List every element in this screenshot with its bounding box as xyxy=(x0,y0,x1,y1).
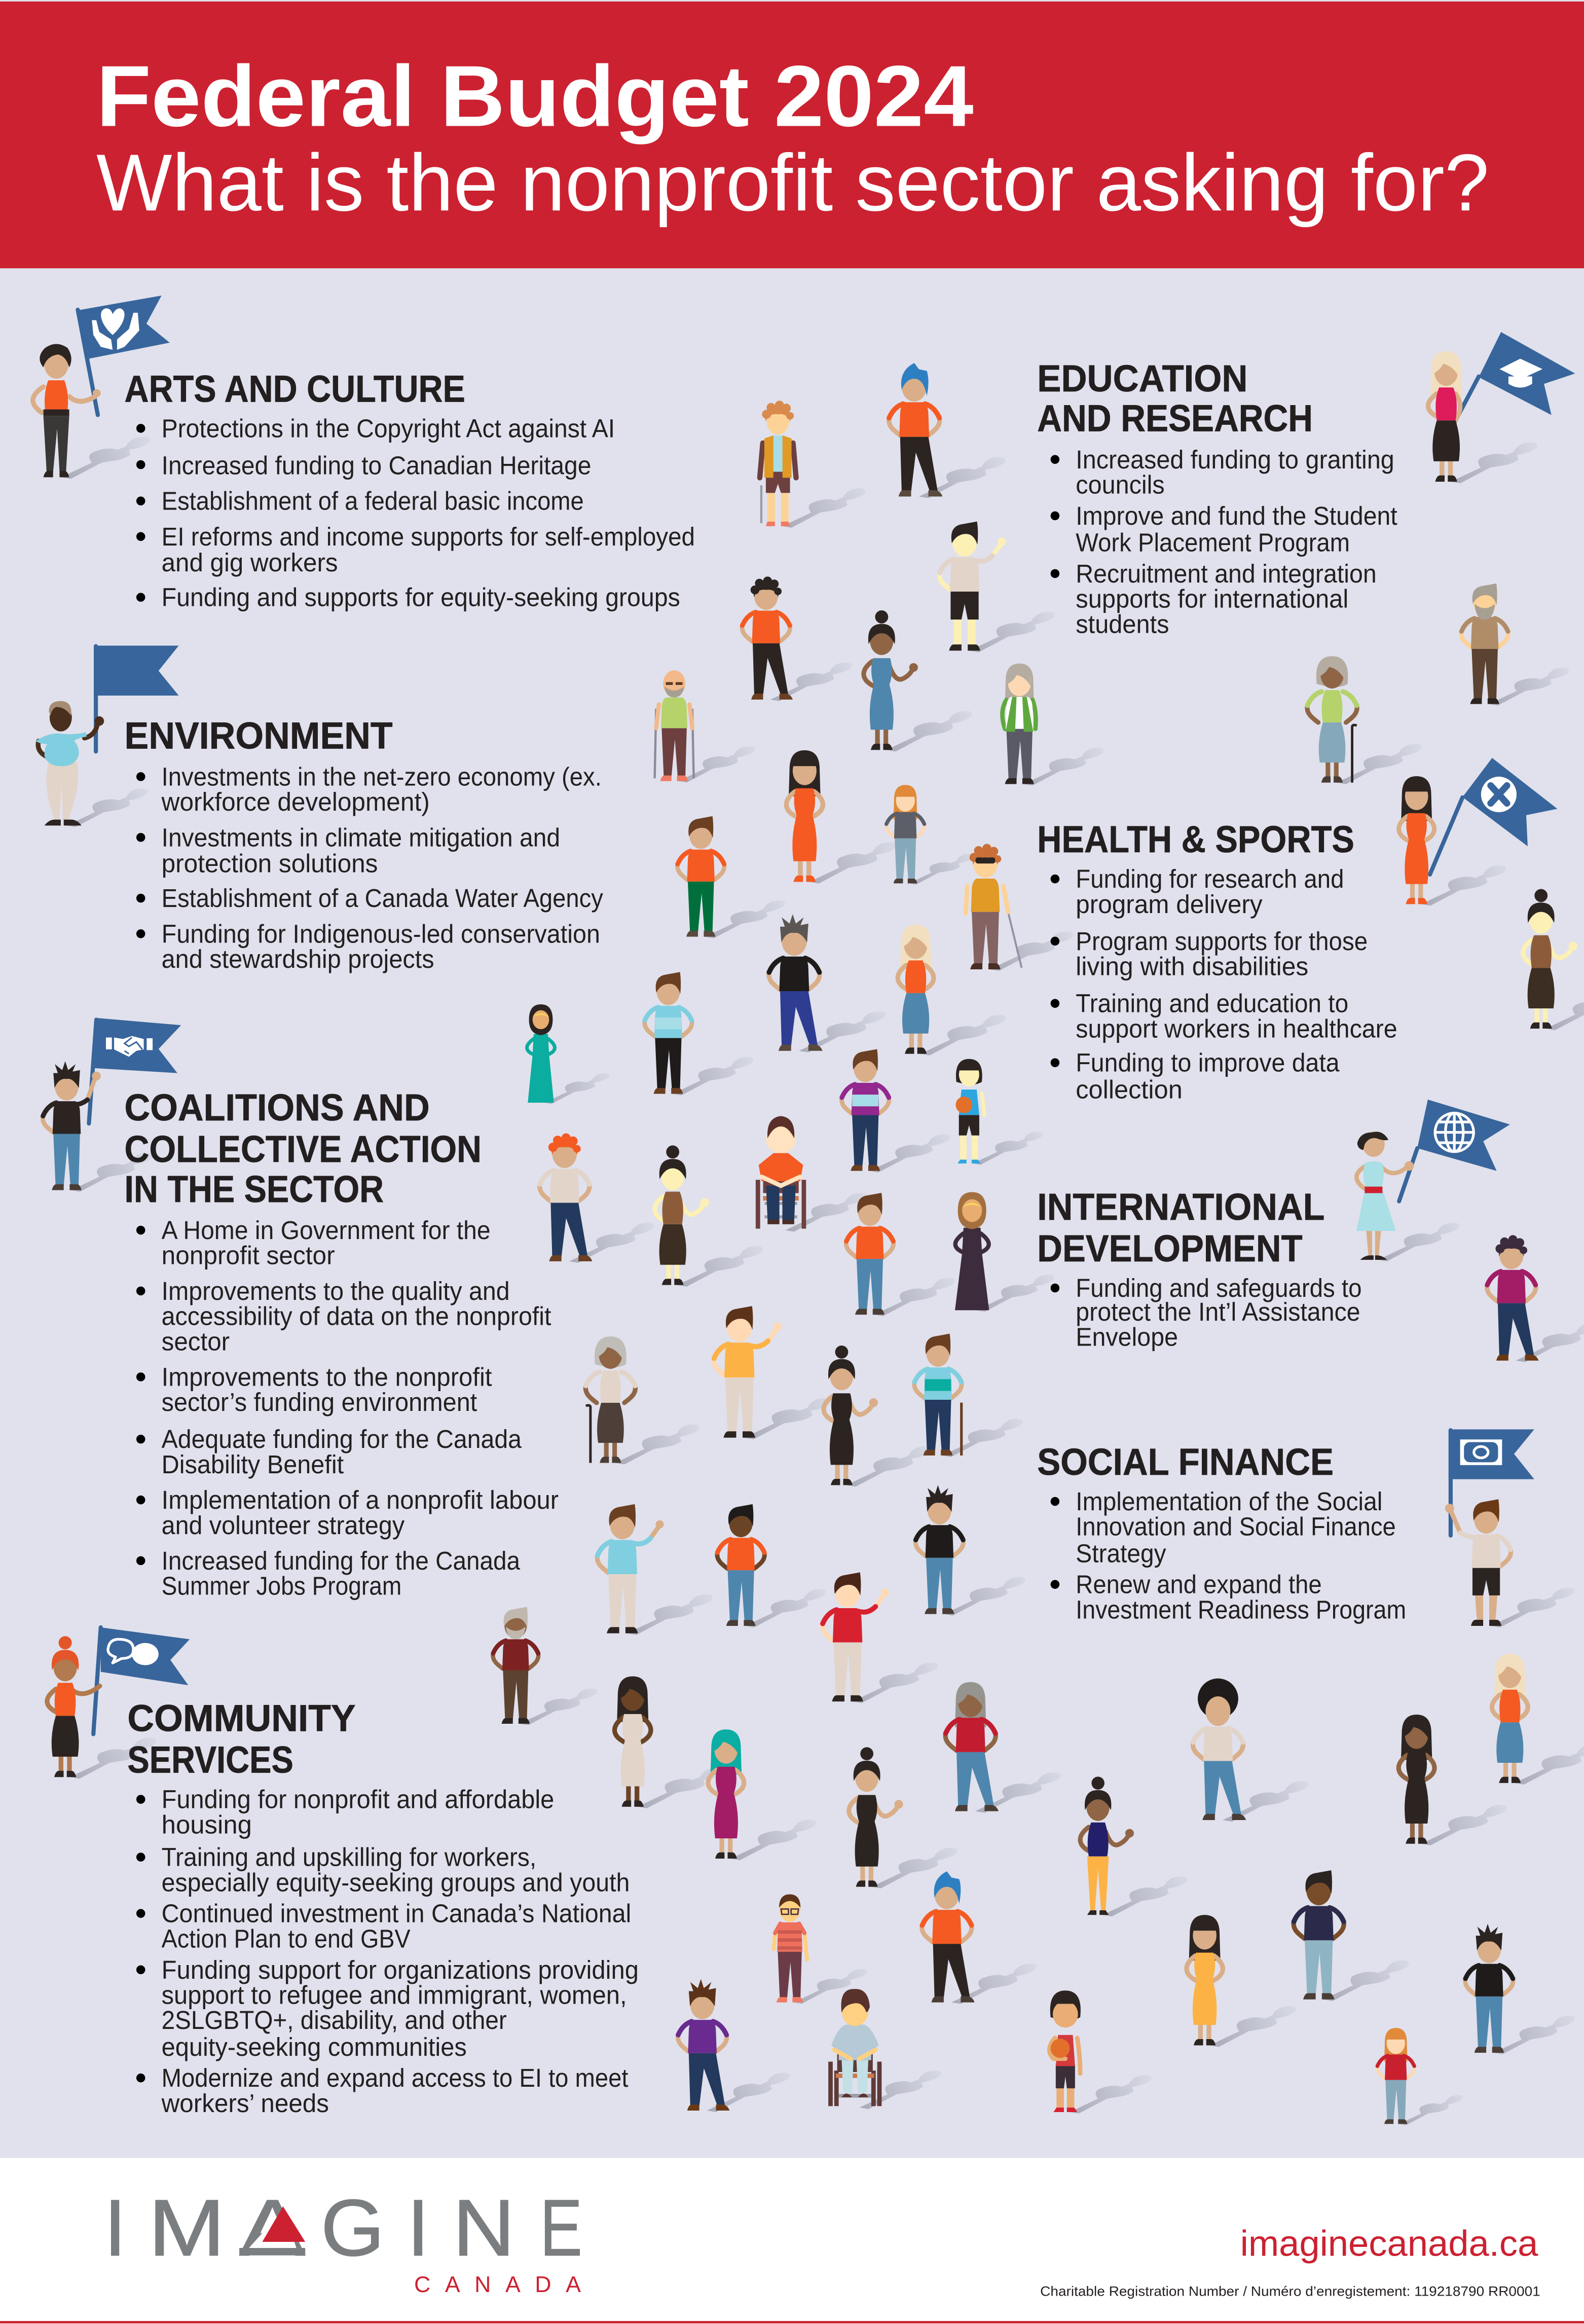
person: gray hair blue pants xyxy=(769,914,886,1052)
person: teal hair magenta dress xyxy=(708,1729,816,1860)
list: education and research: students xyxy=(1076,609,1169,638)
heading: coalitions and collective action: IN THE SECTOR xyxy=(125,1168,384,1210)
list: arts and culture: Funding and supports for equity-seeking groups xyxy=(162,583,680,612)
logo: Imagine Canada: I xyxy=(104,2184,126,2273)
person: gray hair green cardigan xyxy=(1002,664,1103,785)
list: community services: housing xyxy=(162,1810,252,1839)
person: glasses striped top xyxy=(774,1894,867,2004)
person: hijab dark dress xyxy=(955,1192,1054,1312)
person: teal striped top with cane xyxy=(914,1334,1023,1457)
icon: basketball xyxy=(955,1097,972,1113)
list: health and sports: Funding for research and xyxy=(1076,864,1344,893)
person: girl orange hair red top xyxy=(1377,2028,1463,2125)
heading: community services: COMMUNITY xyxy=(127,1697,356,1739)
person: bald man with crutches xyxy=(655,670,755,782)
list: coalitions xyxy=(136,1216,559,1601)
list: education and research: Work Placement Program xyxy=(1076,528,1350,557)
list: environment: protection solutions xyxy=(162,849,378,878)
list: health and sports: program delivery xyxy=(1076,890,1263,919)
person: orange top jeans xyxy=(846,1193,955,1316)
charitable registration number: Charitable Registration Number / Numéro d’enregistement: 119218790 RR0001 xyxy=(1040,2283,1540,2299)
list: coalitions: Disability Benefit xyxy=(162,1450,344,1479)
list: international development: Funding and safeguards to xyxy=(1076,1274,1362,1302)
flag bearer: coalitions xyxy=(43,1018,181,1191)
list: arts and culture: and gig workers xyxy=(162,548,338,577)
person: green pants xyxy=(677,816,785,938)
list: coalitions: sector’s funding environment xyxy=(162,1388,477,1417)
person: dark skin navy top xyxy=(1294,1870,1409,2001)
panel: social finance xyxy=(1037,1441,1406,1624)
list: community services: Training and upskilling for workers, xyxy=(162,1843,536,1872)
heading: international development: DEVELOPMENT xyxy=(1037,1227,1303,1269)
heading: arts and culture: ARTS AND CULTURE xyxy=(125,368,465,410)
person: old man maroon sweater xyxy=(493,1607,597,1725)
heading: education and research xyxy=(1037,357,1313,440)
panel: arts and culture xyxy=(125,368,695,612)
person: purple top navy pants xyxy=(678,1979,790,2112)
person: striped top black pants xyxy=(645,972,753,1095)
list: community services: workers’ needs xyxy=(161,2089,329,2118)
list: community services: Funding support for organizations providing xyxy=(162,1955,639,1984)
list: arts and culture: Establishment of a federal basic income xyxy=(162,487,584,516)
header banner xyxy=(0,2,1584,268)
list: coalitions: Increased funding for the Canada xyxy=(162,1546,521,1575)
list: environment xyxy=(136,762,603,973)
person: child with basketball red top xyxy=(1049,1990,1151,2114)
list: international development: protect the Int’l Assistance xyxy=(1076,1297,1360,1326)
list: arts and culture: Protections in the Copyright Act against AI xyxy=(162,414,615,443)
heading: environment: ENVIRONMENT xyxy=(125,714,393,756)
person: long hair black dress xyxy=(1398,1715,1507,1845)
list: environment: Investments in climate mitigation and xyxy=(162,823,560,852)
flag icon: banknote xyxy=(1449,1429,1534,1479)
list: coalitions: Summer Jobs Program xyxy=(162,1572,401,1601)
flag bearer: education xyxy=(1428,332,1575,483)
person: light blue top waving xyxy=(597,1504,713,1635)
logo: Imagine Canada: G xyxy=(321,2184,385,2273)
flag bearer: community services xyxy=(47,1627,190,1778)
person: yellow top waving xyxy=(714,1306,831,1439)
icon: basketball red xyxy=(1051,2039,1070,2058)
person: boy in wheelchair xyxy=(828,1989,941,2109)
list: education and research xyxy=(1051,445,1397,638)
list: education and research: Improve and fund the Student xyxy=(1076,501,1397,530)
list: community services: 2SLGBTQ+, disability, and other xyxy=(162,2006,507,2035)
logo: Imagine Canada: M xyxy=(148,2184,225,2273)
person: red top waving xyxy=(823,1572,938,1703)
person: curly hair orange top xyxy=(742,576,852,701)
panel: environment xyxy=(125,714,603,973)
heading: coalitions and collective action xyxy=(125,1086,482,1210)
flag icon: globe xyxy=(1417,1100,1510,1171)
person: spiky hair black top xyxy=(915,1485,1025,1616)
person: blonde orange top blue skirt xyxy=(898,925,1006,1056)
person: curly orange hair with cane xyxy=(760,401,866,528)
person: bun brown top waving xyxy=(1523,889,1584,1030)
panel: health and sports xyxy=(1037,818,1397,1104)
flag bearer: environment xyxy=(35,645,179,827)
list: social finance: Strategy xyxy=(1076,1539,1166,1568)
list: coalitions: Adequate funding for the Canada xyxy=(162,1425,522,1454)
person: woman in blue dress waving xyxy=(864,610,972,751)
list: environment: workforce development) xyxy=(161,787,430,816)
crowd of people xyxy=(493,363,1584,2125)
list: health and sports: Training and education to xyxy=(1076,989,1348,1018)
list: social finance: Implementation of the Social xyxy=(1076,1487,1382,1516)
person: blue hair xyxy=(889,363,1005,498)
person: child with basketball xyxy=(955,1059,1043,1165)
list: coalitions: A Home in Government for the xyxy=(162,1216,491,1245)
website url: imaginecanada.ca xyxy=(1240,2224,1538,2264)
heading: coalitions and collective action: COLLECTIVE ACTION xyxy=(125,1128,482,1170)
person: bun black dress waving xyxy=(849,1747,957,1889)
list: health and sports: Funding to improve data xyxy=(1076,1048,1340,1077)
list: health and sports: living with disabilities xyxy=(1076,952,1308,981)
flag: environment xyxy=(94,645,179,696)
person: hijab teal dress xyxy=(527,1004,610,1104)
list: community services: Continued investment in Canada’s National xyxy=(162,1899,631,1928)
person: magenta top navy pants xyxy=(1487,1235,1584,1362)
flag icon: graduation cap xyxy=(1479,332,1575,415)
person: bun navy top yellow pants waving xyxy=(1080,1776,1187,1916)
flag icon: speech bubbles xyxy=(101,1627,190,1685)
list: arts and culture xyxy=(136,414,695,612)
list: arts and culture: Increased funding to Canadian Heritage xyxy=(162,451,591,480)
logo: Imagine Canada: A xyxy=(239,2184,305,2273)
list: environment: Funding for Indigenous-led conservation xyxy=(162,919,600,948)
person: purple striped top xyxy=(841,1049,950,1172)
heading: education and research: EDUCATION xyxy=(1037,357,1247,400)
person: orange spiky hair xyxy=(540,1134,654,1263)
list: education and research: councils xyxy=(1076,470,1165,499)
list: health and sports: Program supports for those xyxy=(1076,927,1368,956)
flag icon: handshake xyxy=(93,1018,181,1073)
list: environment: Investments in the net-zero economy (ex. xyxy=(162,762,602,791)
subtitle: What is the nonprofit sector asking for? xyxy=(96,137,1489,228)
person: older woman with cane xyxy=(585,1336,700,1465)
list: health and sports: support workers in healthcare xyxy=(1076,1014,1397,1043)
title: Federal Budget 2024 xyxy=(96,48,974,144)
heading: education and research: AND RESEARCH xyxy=(1037,397,1313,440)
person: girl orange hair gray top xyxy=(886,785,974,885)
list: health and sports: collection xyxy=(1076,1075,1183,1104)
flag bearer: health and sports xyxy=(1399,758,1557,905)
list: community services xyxy=(136,1785,639,2118)
list: social finance: Innovation and Social Finance xyxy=(1076,1512,1396,1541)
heading: community services xyxy=(127,1697,356,1781)
list: community services: equity-seeking communities xyxy=(162,2032,467,2061)
logo: Imagine Canada: N xyxy=(453,2184,515,2273)
list: social finance: Investment Readiness Program xyxy=(1076,1595,1406,1624)
person: blonde orange top blue skirt xyxy=(1492,1654,1584,1785)
flag icon: x in circle xyxy=(1462,758,1557,846)
heading: health and sports: HEALTH & SPORTS xyxy=(1037,818,1354,860)
footer xyxy=(0,2158,1584,2324)
person: old man gray beard xyxy=(1461,584,1569,706)
flag bearer: social finance xyxy=(1445,1429,1575,1627)
person: spiky hair black top jeans xyxy=(1465,1924,1575,2054)
heading: coalitions and collective action: COALITIONS AND xyxy=(125,1086,430,1129)
list: coalitions: accessibility of data on the nonprofit xyxy=(162,1302,551,1331)
logo: Imagine Canada: I xyxy=(407,2184,429,2273)
person: gray hair red top xyxy=(945,1682,1061,1813)
heading: community services: SERVICES xyxy=(127,1738,293,1781)
list: social finance xyxy=(1051,1487,1406,1624)
list: health and sports xyxy=(1051,864,1397,1104)
list: environment: and stewardship projects xyxy=(162,945,434,973)
person: woman orange dress xyxy=(786,750,897,884)
logo: Imagine Canada: CANADA xyxy=(414,2272,581,2297)
list: community services: Modernize and expand access to EI to meet xyxy=(162,2063,628,2092)
flag icon: heart in hands xyxy=(78,296,170,358)
logo: Imagine Canada xyxy=(104,2184,582,2297)
panel: education and research xyxy=(1037,357,1397,638)
list: coalitions: nonprofit sector xyxy=(162,1241,335,1270)
person: woman beige dress xyxy=(615,1677,724,1808)
heading: international development xyxy=(1037,1186,1324,1269)
list: community services: support to refugee and immigrant, women, xyxy=(162,1981,627,2010)
list: education and research: Increased funding to granting xyxy=(1076,445,1394,474)
panel: community services xyxy=(127,1697,639,2118)
flag bearer: arts and culture xyxy=(33,296,170,479)
list: arts and culture: EI reforms and income supports for self-employed xyxy=(162,522,695,551)
list: coalitions: and volunteer strategy xyxy=(162,1511,404,1540)
list: social finance: Renew and expand the xyxy=(1076,1570,1322,1599)
list: community services: Action Plan to end GBV xyxy=(162,1924,411,1953)
heading: social finance: SOCIAL FINANCE xyxy=(1037,1441,1334,1483)
person: woman in wheelchair xyxy=(756,1116,867,1231)
list: coalitions: Improvements to the quality and xyxy=(162,1277,510,1305)
list: coalitions: Implementation of a nonprofit labour xyxy=(162,1485,559,1514)
flag bearer: international development xyxy=(1356,1100,1510,1261)
heading: international development: INTERNATIONAL xyxy=(1037,1186,1324,1228)
list: international development xyxy=(1051,1274,1362,1352)
person: older woman green top with cane xyxy=(1307,656,1421,784)
person: waving with shorts xyxy=(939,522,1055,652)
logo: Imagine Canada: E xyxy=(540,2184,582,2273)
panel: coalitions and collective action xyxy=(125,1086,559,1601)
person: woman yellow dress xyxy=(1187,1915,1296,2047)
list: environment: Establishment of a Canada Water Agency xyxy=(162,884,603,913)
person: dark skin orange top xyxy=(717,1504,826,1627)
person: bun with brown top xyxy=(655,1145,763,1287)
person: blue hair orange top xyxy=(922,1871,1036,2004)
list: education and research: supports for international xyxy=(1076,585,1348,613)
list: coalitions: Improvements to the nonprofit xyxy=(162,1362,492,1391)
list: education and research: Recruitment and integration xyxy=(1076,559,1377,588)
person: sunglasses with white cane xyxy=(966,844,1073,971)
person: bun with black dress waving xyxy=(824,1346,932,1486)
person: afro beige top xyxy=(1193,1679,1308,1822)
list: international development: Envelope xyxy=(1076,1323,1178,1352)
list: coalitions: sector xyxy=(162,1327,230,1356)
list: community services: Funding for nonprofit and affordable xyxy=(162,1785,554,1814)
list: community services: especially equity-seeking groups and youth xyxy=(162,1868,630,1897)
panel: international development xyxy=(1037,1186,1362,1352)
